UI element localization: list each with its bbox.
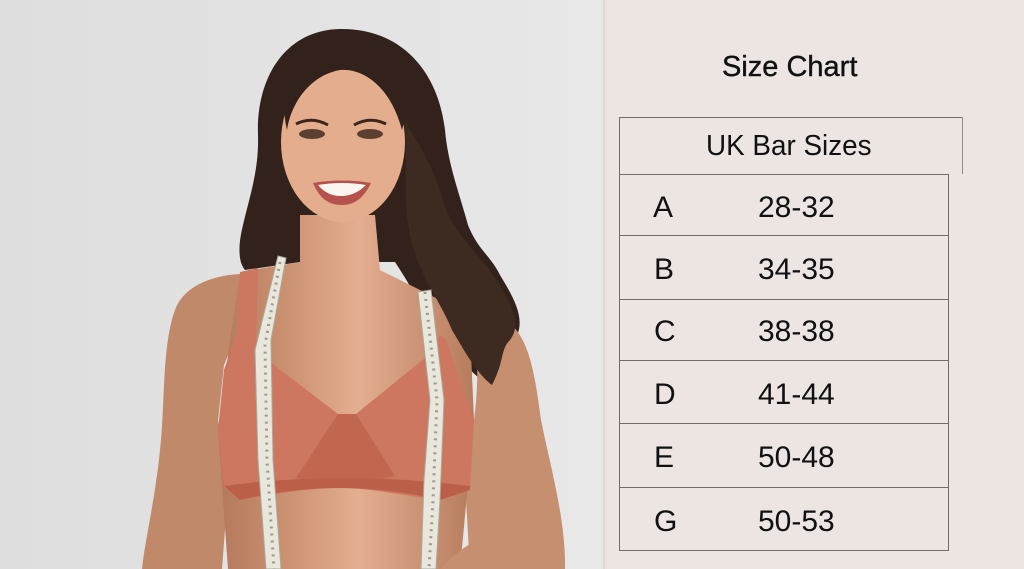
hair side	[405, 120, 515, 385]
row E: E	[654, 441, 674, 474]
row D: D	[654, 378, 676, 411]
row A	[653, 191, 835, 224]
left arm	[142, 274, 240, 569]
model photo illustration	[142, 29, 565, 569]
right arm	[466, 325, 565, 569]
table: UK bar sizes	[619, 117, 963, 551]
row D: 41-44	[758, 378, 835, 411]
row C: C	[654, 315, 676, 348]
row C	[654, 315, 835, 348]
table header: UK Bar Sizes	[706, 130, 872, 162]
heading: Size Chart: Size Chart	[722, 51, 857, 83]
bra garment	[218, 268, 474, 500]
eyes	[296, 120, 386, 139]
measuring tape	[255, 256, 444, 569]
smile	[313, 180, 371, 205]
row A: A	[653, 191, 673, 224]
face	[281, 42, 405, 222]
panel: size chart	[603, 0, 1024, 569]
row G: 50-53	[758, 505, 835, 538]
row D	[654, 378, 835, 411]
row E: 50-48	[758, 441, 835, 474]
row B: 34-35	[758, 253, 835, 286]
row G	[654, 505, 835, 538]
row A: 28-32	[758, 191, 835, 224]
row G: G	[654, 505, 677, 538]
row B	[654, 253, 835, 286]
hair back	[239, 29, 520, 386]
torso	[218, 215, 520, 569]
row B: B	[654, 253, 674, 286]
row C: 38-38	[758, 315, 835, 348]
row E	[654, 441, 835, 474]
